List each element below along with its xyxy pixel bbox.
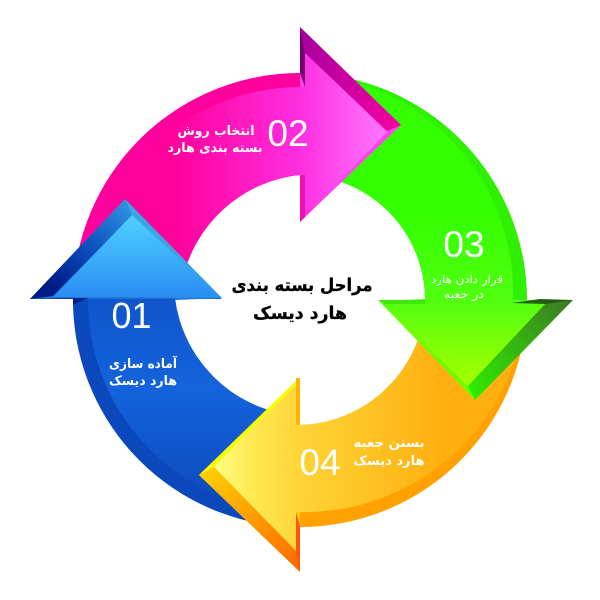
step 01 number: 01	[111, 295, 152, 336]
step 03 label: قرار دادن هارد	[431, 272, 503, 287]
step 03 number: 03	[443, 224, 485, 265]
step 01 label: هارد دیسک	[109, 374, 177, 389]
arrowhead: orange	[199, 378, 300, 572]
step 03 label: در جعبه	[444, 287, 484, 302]
step 02 label: انتخاب روش	[178, 124, 254, 139]
step 04 label: هارد دیسک	[354, 454, 424, 469]
arc body: blue step 01	[73, 298, 285, 526]
step 01 label: آماده سازی	[109, 355, 177, 372]
arrowhead: pink	[300, 27, 401, 222]
center title: هارد دیسک	[253, 304, 347, 324]
step 04 label	[354, 436, 424, 469]
arc body: pink step 02	[74, 73, 300, 285]
step 02 label: بسته بندی هارد	[168, 141, 262, 156]
step 01 label	[109, 355, 177, 389]
center title: مراحل بسته بندی	[232, 276, 372, 296]
step 02 label	[168, 124, 262, 156]
arrowhead: blue	[30, 199, 222, 305]
arc body: green step 03	[320, 76, 527, 302]
center title	[232, 276, 372, 324]
arc body: orange step 04	[298, 320, 526, 527]
step 04 number: 04	[299, 442, 341, 483]
step 03 label	[431, 272, 503, 302]
step 02 number: 02	[267, 113, 309, 154]
arrowhead: green	[378, 299, 573, 400]
step 04 label: بستن جعبه	[354, 436, 424, 451]
